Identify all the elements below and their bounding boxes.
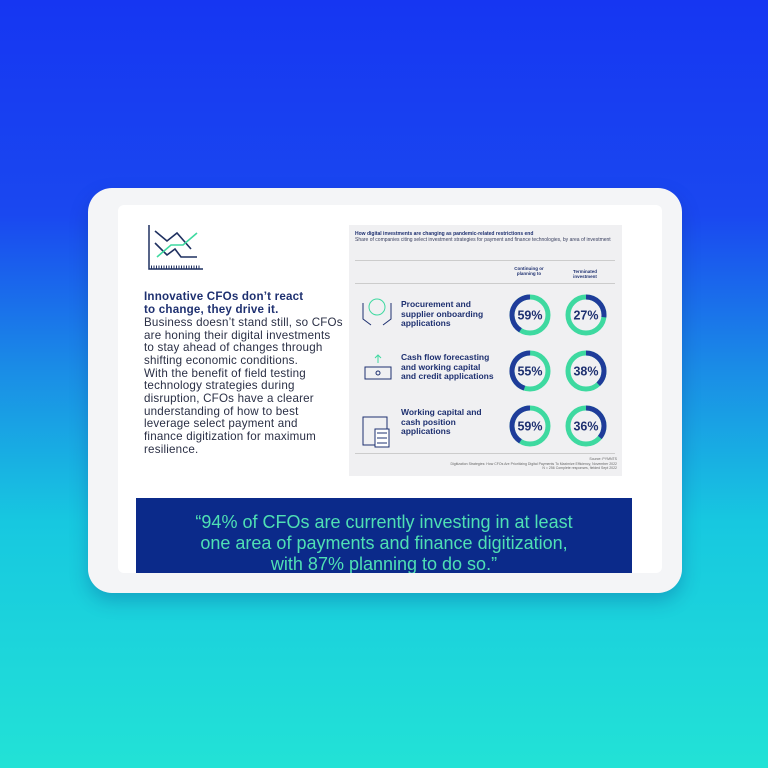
quote band bbox=[136, 498, 632, 574]
donuts: 36% bbox=[573, 420, 599, 434]
text block: intro: to stay ahead of changes through bbox=[144, 341, 323, 354]
text block: intro: to change, they drive it. bbox=[144, 303, 278, 316]
text block: intro: technology strategies during bbox=[144, 379, 295, 392]
text block: intro: finance digitization for maximum bbox=[144, 430, 316, 443]
text block: intro: leverage select payment and bbox=[144, 417, 298, 430]
panel: chart: Working capital and bbox=[401, 407, 482, 417]
donuts: 59% bbox=[517, 420, 543, 434]
panel: chart bbox=[349, 225, 622, 476]
panel: chart: and working capital bbox=[401, 362, 480, 372]
donuts: 38% bbox=[573, 364, 599, 378]
donuts: 59% bbox=[517, 308, 543, 322]
icons bbox=[362, 298, 392, 448]
source note: Digitization Strategies: How CFOs Are Prioritizing Digital Payments To Maximize Efficiency, November 2022 bbox=[450, 462, 617, 466]
panel: chart: Terminated investment bbox=[573, 269, 597, 279]
panel: chart: and credit applications bbox=[401, 371, 494, 381]
chart title: How digital investments are changing as pandemic-related restrictions end bbox=[355, 231, 533, 237]
quote band: one area of payments and finance digitization, bbox=[200, 533, 568, 553]
row labels: supplier onboarding bbox=[401, 308, 483, 318]
quote band: “94% of CFOs are currently investing in at least bbox=[195, 512, 573, 532]
text block: intro: disruption, CFOs have a clearer bbox=[144, 392, 314, 405]
panel: chart: cash position bbox=[401, 416, 456, 426]
text block: intro: shifting economic conditions. bbox=[144, 354, 298, 367]
chart title: Share of companies citing select investment strategies for payment and finance technologies, by area of investment bbox=[355, 237, 611, 243]
text block: intro: are honing their digital investments bbox=[144, 329, 330, 342]
donuts: 55% bbox=[517, 364, 543, 378]
row labels bbox=[401, 299, 483, 328]
text block: intro: understanding of how to best bbox=[144, 405, 298, 418]
text block: intro: Business doesn’t stand still, so CFOs bbox=[144, 316, 343, 329]
text block: intro: resilience. bbox=[144, 443, 198, 456]
donuts: 27% bbox=[573, 308, 599, 322]
panel: chart: applications bbox=[401, 426, 451, 436]
icon: chart bbox=[148, 225, 203, 270]
row labels: Procurement and bbox=[401, 299, 471, 309]
column headers: Continuing or planning to bbox=[514, 266, 544, 276]
donuts bbox=[509, 294, 606, 446]
source note: N = 256 Complete responses, fielded Sept 2022 bbox=[542, 466, 617, 470]
source note: Source: PYMNTS bbox=[589, 457, 617, 461]
text block: intro: With the benefit of field testing bbox=[144, 367, 306, 380]
source note bbox=[450, 457, 617, 470]
chart title bbox=[355, 231, 611, 243]
row labels: applications bbox=[401, 318, 451, 328]
panel: chart: Cash flow forecasting bbox=[401, 352, 489, 362]
text block: intro bbox=[144, 290, 343, 456]
screen bbox=[118, 205, 662, 573]
tablet bbox=[88, 188, 682, 593]
text block: intro: Innovative CFOs don’t react bbox=[144, 290, 303, 303]
